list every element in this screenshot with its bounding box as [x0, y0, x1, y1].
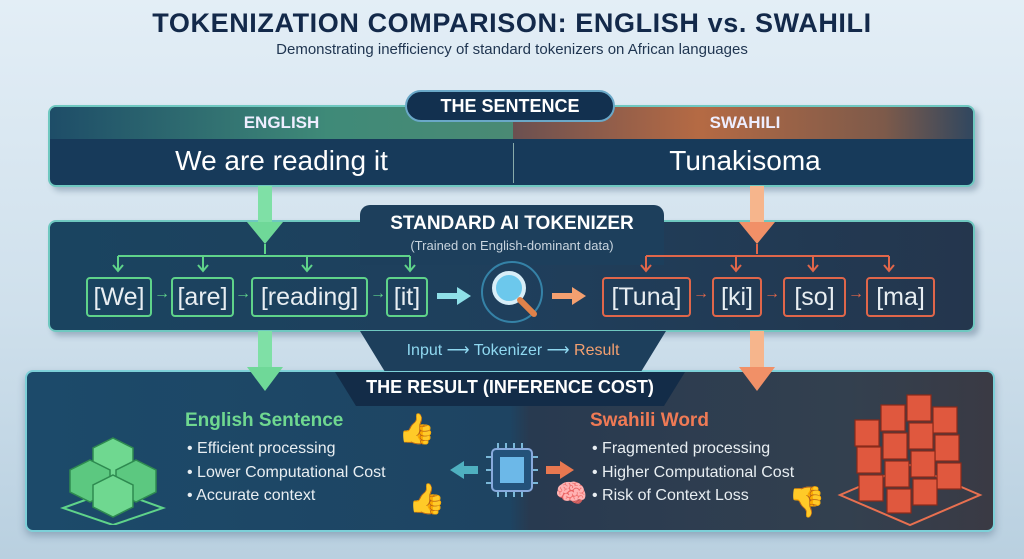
- icon: thumbs up orange: 👍: [408, 483, 445, 516]
- panel: result: [25, 370, 995, 532]
- arrow: swahili to result: [739, 331, 775, 391]
- title: TOKENIZATION COMPARISON: ENGLISH vs. SWAHILI: [152, 8, 872, 38]
- tab: result title: [335, 372, 685, 406]
- text: swahili result: [590, 410, 794, 504]
- tab: result title: THE RESULT (INFERENCE COST): [366, 377, 654, 397]
- text: swahili result: Swahili Word: [590, 410, 709, 431]
- icon: red cube stack: [838, 394, 982, 526]
- english tokens: [it]: [394, 283, 420, 311]
- swahili sentence: Tunakisoma: [669, 145, 821, 176]
- tab: tokenizer title: STANDARD AI TOKENIZER: [390, 213, 634, 234]
- swahili tokens: [Tuna]: [612, 283, 681, 311]
- english tokens: [reading]: [261, 283, 358, 311]
- tab: tokenizer title: (Trained on English-dominant data): [410, 238, 614, 253]
- swahili tokens: [ma]: [876, 283, 925, 311]
- heading: english: ENGLISH: [244, 113, 319, 132]
- arrow: english down: [247, 186, 283, 244]
- text: swahili result: • Fragmented processing: [592, 440, 770, 457]
- swahili tokens: →: [693, 285, 709, 302]
- text: swahili result: • Risk of Context Loss: [592, 487, 749, 504]
- heading: swahili: SWAHILI: [710, 113, 780, 132]
- branch lines english: [112, 244, 416, 272]
- arrow: from tokenizer: [552, 287, 586, 305]
- icon: magnifier: [481, 261, 543, 323]
- english tokens: →: [154, 285, 170, 302]
- tab: input tokenizer result: [360, 331, 666, 371]
- arrow: swahili down: [739, 186, 775, 244]
- tab: input tokenizer result: Input ⟶ Tokenizer ⟶ Result: [407, 342, 619, 359]
- swahili tokens: [ki]: [721, 283, 753, 311]
- english sentence: We are reading it: [175, 145, 388, 176]
- swahili tokens: [602, 277, 935, 317]
- text: english result: • Lower Computational Cost: [187, 464, 386, 481]
- arrow: english to result: [247, 331, 283, 391]
- english tokens: [86, 277, 428, 317]
- subtitle: Demonstrating inefficiency of standard tokenizers on African languages: [276, 41, 748, 58]
- text: swahili result: • Higher Computational Cost: [592, 464, 794, 481]
- swahili tokens: [so]: [794, 283, 835, 311]
- text: english result: English Sentence: [185, 410, 343, 431]
- english tokens: →: [235, 285, 251, 302]
- arrow: to tokenizer: [437, 287, 471, 305]
- tab: the sentence: THE SENTENCE: [440, 96, 580, 116]
- text: english result: • Efficient processing: [187, 440, 336, 457]
- panel: sentence: [48, 105, 975, 187]
- english tokens: [are]: [177, 283, 228, 311]
- icon: thumbs up green: 👍: [398, 413, 435, 446]
- tab: tokenizer title: [360, 205, 664, 265]
- english tokens: [We]: [94, 283, 144, 311]
- english tokens: →: [370, 285, 386, 302]
- text: english result: [185, 410, 386, 504]
- text: english result: • Accurate context: [187, 487, 315, 504]
- panel: tokenizer: [48, 220, 975, 332]
- icon: thumbs down: 👎: [788, 486, 825, 519]
- icon: brain: 🧠: [555, 478, 587, 508]
- swahili tokens: →: [848, 285, 864, 302]
- tab: the sentence: [405, 90, 615, 122]
- icon: green cubes: [60, 437, 166, 525]
- swahili tokens: →: [764, 285, 780, 302]
- icon: chip: [450, 443, 574, 497]
- branch lines swahili: [640, 244, 895, 272]
